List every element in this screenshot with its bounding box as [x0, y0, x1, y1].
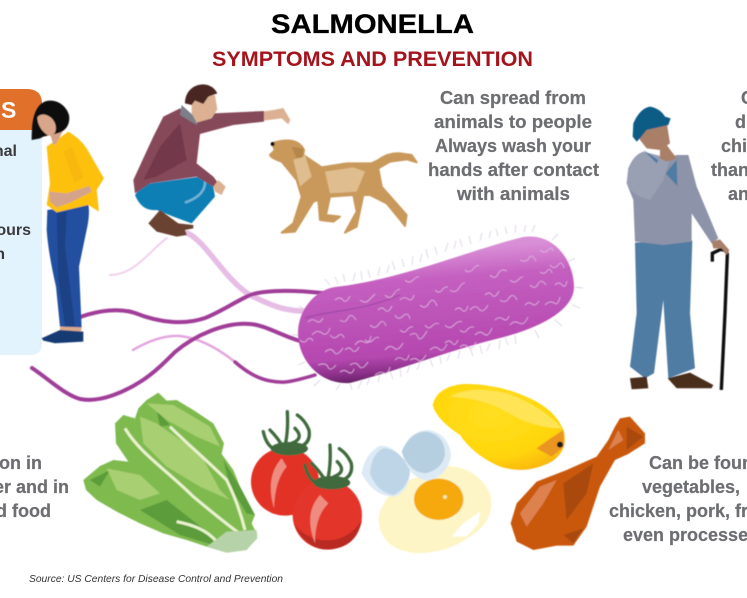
tomatoes: [251, 412, 362, 550]
neck: [50, 130, 63, 145]
crouching man: [133, 84, 290, 237]
cane: [712, 249, 727, 390]
torso shading: [143, 123, 187, 180]
text: spread from animals: Always wash your: [435, 136, 591, 156]
ankles: [60, 327, 82, 332]
shoes: [148, 210, 193, 237]
left eggshell rim: [362, 446, 410, 497]
panel header: [0, 89, 42, 130]
egg: [362, 430, 491, 553]
left eggshell: [370, 448, 410, 495]
egg white: [378, 466, 491, 553]
text: where it can be found, cropped at right edge: [609, 453, 747, 545]
face: [192, 95, 217, 123]
hair: [185, 84, 217, 105]
trousers: [630, 241, 695, 378]
text: spread from animals: Can spread from: [440, 88, 586, 108]
text: at-risk groups, cropped at right edge: [711, 88, 747, 204]
text: where it can be found, cropped at right edge: vegetables,: [642, 477, 740, 497]
woman: [32, 101, 104, 343]
front tomato shade: [293, 520, 362, 549]
jeans shading: [57, 212, 75, 327]
dog nose: [271, 142, 275, 146]
shirt shading: [63, 147, 83, 183]
old man: [627, 107, 729, 390]
right shoe: [668, 373, 713, 388]
subtitle: SYMPTOMS AND PREVENTION: [212, 48, 533, 71]
pointing hand: [264, 108, 290, 124]
shirt collar: [643, 150, 677, 186]
yolk: [414, 479, 463, 520]
front tomato stem: [305, 445, 352, 489]
chicken leg: [511, 417, 645, 550]
stem: [207, 530, 257, 553]
text: spread from animals: [428, 88, 599, 204]
shirt: [47, 132, 104, 212]
torso: [133, 108, 264, 193]
text: spread from animals: with animals: [456, 184, 570, 204]
right eggshell: [402, 432, 445, 473]
bacterium texture: [300, 248, 567, 375]
left shoe: [630, 377, 648, 389]
mango: [433, 384, 565, 470]
knee highlight: [185, 180, 205, 203]
mango shine: [450, 390, 562, 428]
drumstick shade: [563, 427, 643, 543]
sweater: [627, 152, 718, 245]
text: spread from animals: hands after contact: [428, 160, 599, 180]
back tomato: [251, 448, 319, 516]
bacterium body: [298, 236, 574, 383]
hat: [633, 107, 671, 142]
source: Source: US Centers for Disease Control and Prevention: [29, 573, 283, 585]
face: [37, 115, 56, 136]
dog: [270, 141, 417, 233]
mango stem: [557, 442, 563, 448]
collar: [180, 105, 198, 125]
lettuce: [83, 393, 257, 553]
text: spread from animals: animals to people: [434, 112, 592, 132]
mango blush: [537, 430, 564, 457]
hand on knee: [213, 180, 226, 195]
dog ear: [292, 147, 303, 158]
dog light fur: [293, 155, 365, 193]
text: at-risk groups, cropped at right edge: d: [735, 112, 746, 132]
text: at-risk groups, cropped at right edge: chi: [721, 136, 747, 156]
text: food handling, cropped at left edge: [0, 453, 69, 521]
dog silhouette: [270, 141, 417, 233]
panel text: [0, 143, 31, 263]
drumstick: [511, 417, 645, 550]
sweater arm: [627, 152, 670, 200]
light leaf shading: [107, 403, 230, 500]
text: food handling, cropped at left edge: on in: [0, 453, 42, 473]
panel heading: S: [1, 97, 16, 123]
hand on cane: [712, 239, 729, 255]
dark leaf shading: [90, 410, 255, 545]
arm: [49, 186, 92, 207]
shoes: [42, 330, 83, 343]
panel body: [0, 125, 42, 355]
panel: symptoms: [0, 89, 42, 355]
right eggshell rim: [402, 430, 451, 481]
mango body: [433, 384, 565, 470]
hand at chin: [660, 145, 677, 162]
face: [640, 120, 670, 150]
drumstick light: [520, 430, 623, 527]
egg white highlight: [452, 512, 480, 537]
bacterium hairs: [292, 225, 583, 390]
outer leaves: [83, 393, 257, 553]
flagella: [32, 233, 322, 400]
leaf rib: [125, 427, 245, 542]
hair: [32, 101, 69, 140]
title: SALMONELLA: [271, 9, 474, 39]
back tomato highlight: [271, 458, 287, 508]
back tomato stem: [263, 412, 309, 455]
front tomato highlight: [310, 495, 328, 543]
jeans: [135, 177, 215, 223]
front tomato: [293, 480, 362, 550]
bacterium: [292, 225, 583, 390]
yolk highlight: [443, 495, 447, 499]
bacterium highlight: [305, 295, 400, 318]
jeans: [47, 204, 89, 328]
